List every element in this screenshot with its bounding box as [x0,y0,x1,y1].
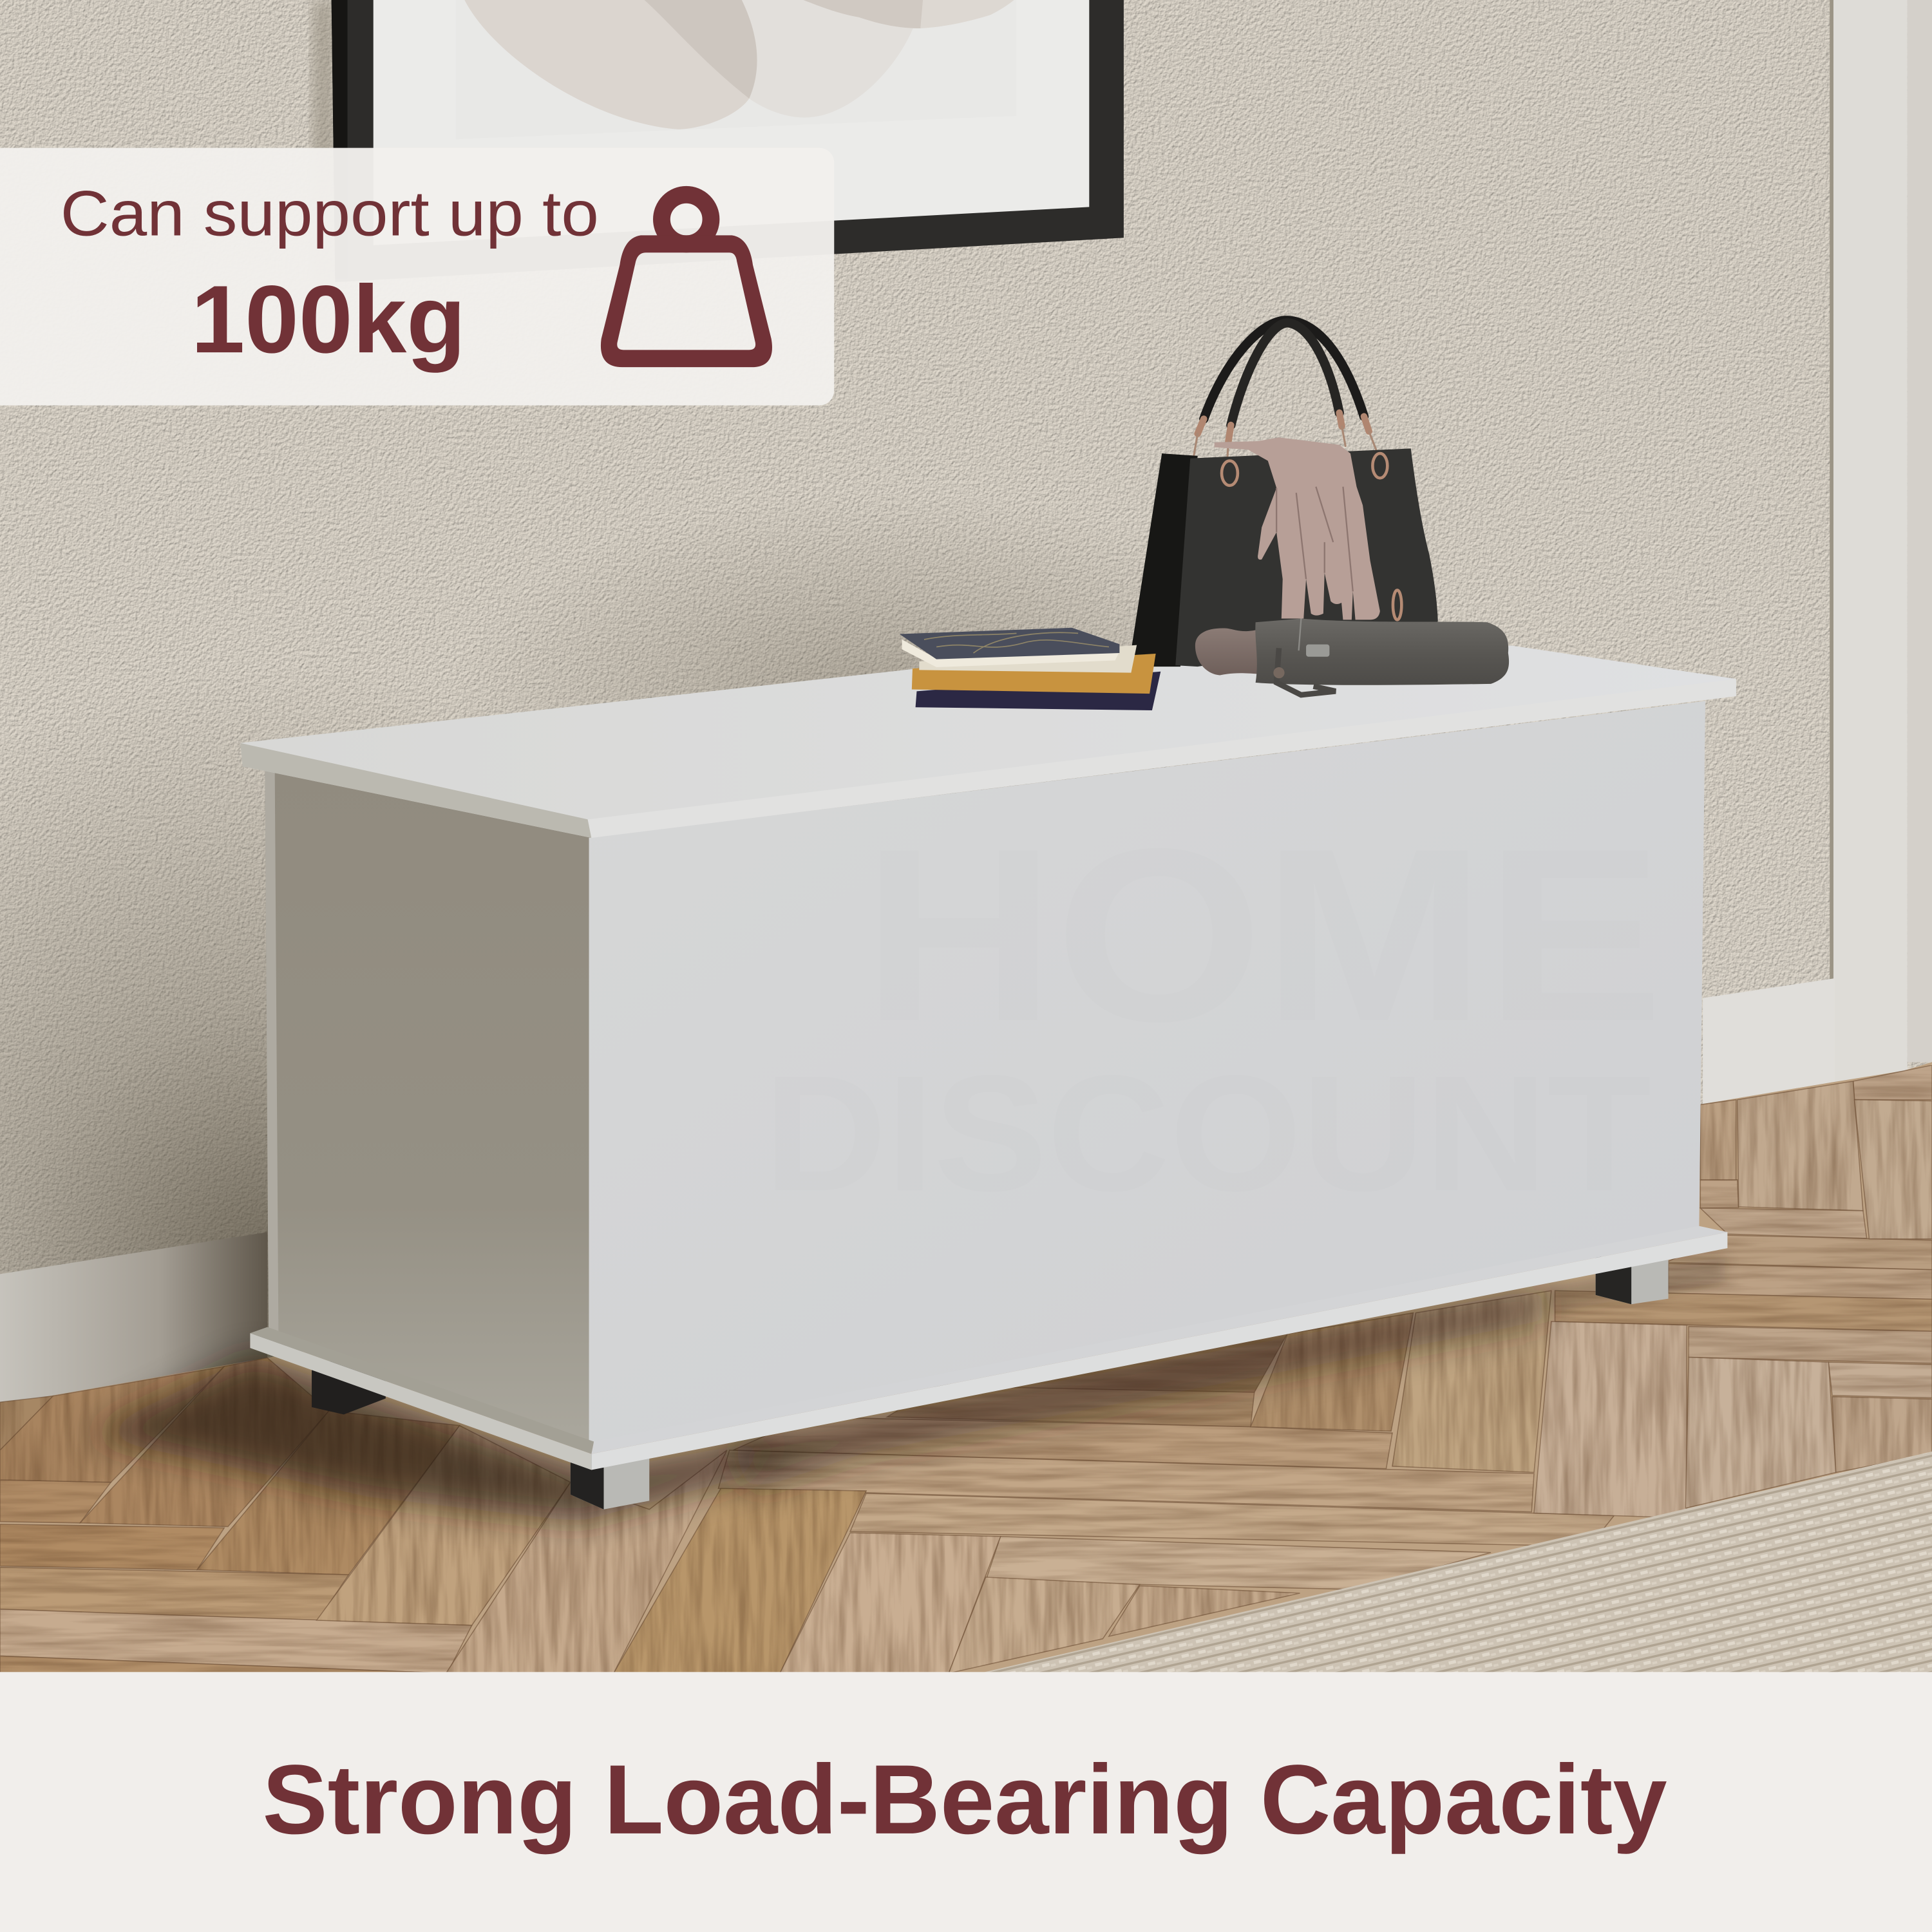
frame inner edge shade [332,0,348,278]
right foot [1596,1257,1669,1304]
herringbone wood floor [0,1062,1932,1676]
slanted planks [0,1081,1932,1673]
door trim and door [1830,0,1932,1084]
umbrella handle [1195,629,1258,675]
umbrella band [1299,618,1301,650]
glove shape [1215,437,1380,620]
right skirting board [1703,978,1835,1104]
picture mat [374,0,1089,245]
faint watermark: HOME [862,798,1663,1073]
icon: weight [601,194,772,367]
wall shadows [0,493,1479,1577]
bag front panel [1175,448,1438,667]
storage chest [240,646,1736,1510]
bag handles [1193,320,1378,462]
side panel light edge [265,766,278,1334]
bag gusset [1131,453,1198,667]
horizontal planks [0,1065,1932,1673]
umbrella [1195,618,1509,695]
gloves [1215,437,1380,620]
cream book [919,645,1137,673]
faint watermark: DISCOUNT [764,1041,1651,1226]
glove seams [1276,487,1353,591]
callout panel [0,148,834,405]
frame wall shadow [313,0,335,286]
umbrella strap [1276,648,1336,695]
umbrella sleeve [1255,618,1509,685]
rug [980,1452,1932,1673]
bag rings [1222,453,1401,620]
umbrella tag [1306,645,1329,657]
patterned book [900,628,1119,667]
umbrella knob [1273,667,1285,678]
artwork [456,0,1016,139]
floor base [0,1062,1932,1676]
callout line one: Can support up to [61,178,599,249]
chest shadow on floor [86,1257,1725,1522]
callout: weight capacity [0,148,834,405]
stack of books [900,628,1160,710]
rear left foot [312,1361,386,1414]
banner heading: Strong Load-Bearing Capacity [263,1745,1667,1855]
frame moulding [332,0,1124,282]
chest side panel [265,766,594,1442]
bottom banner [0,1672,1932,1932]
banner background [0,1672,1932,1932]
front foot [571,1454,649,1510]
callout value: 100kg [191,265,466,373]
orange book [912,654,1156,694]
picture frame [313,0,1124,286]
left skirting board [0,1232,267,1405]
handbag [1131,320,1438,667]
faint watermark [764,798,1663,1226]
chest lid [240,646,1736,838]
navy book [916,672,1160,710]
chest front panel [589,701,1705,1444]
chest base plate [250,1226,1727,1470]
